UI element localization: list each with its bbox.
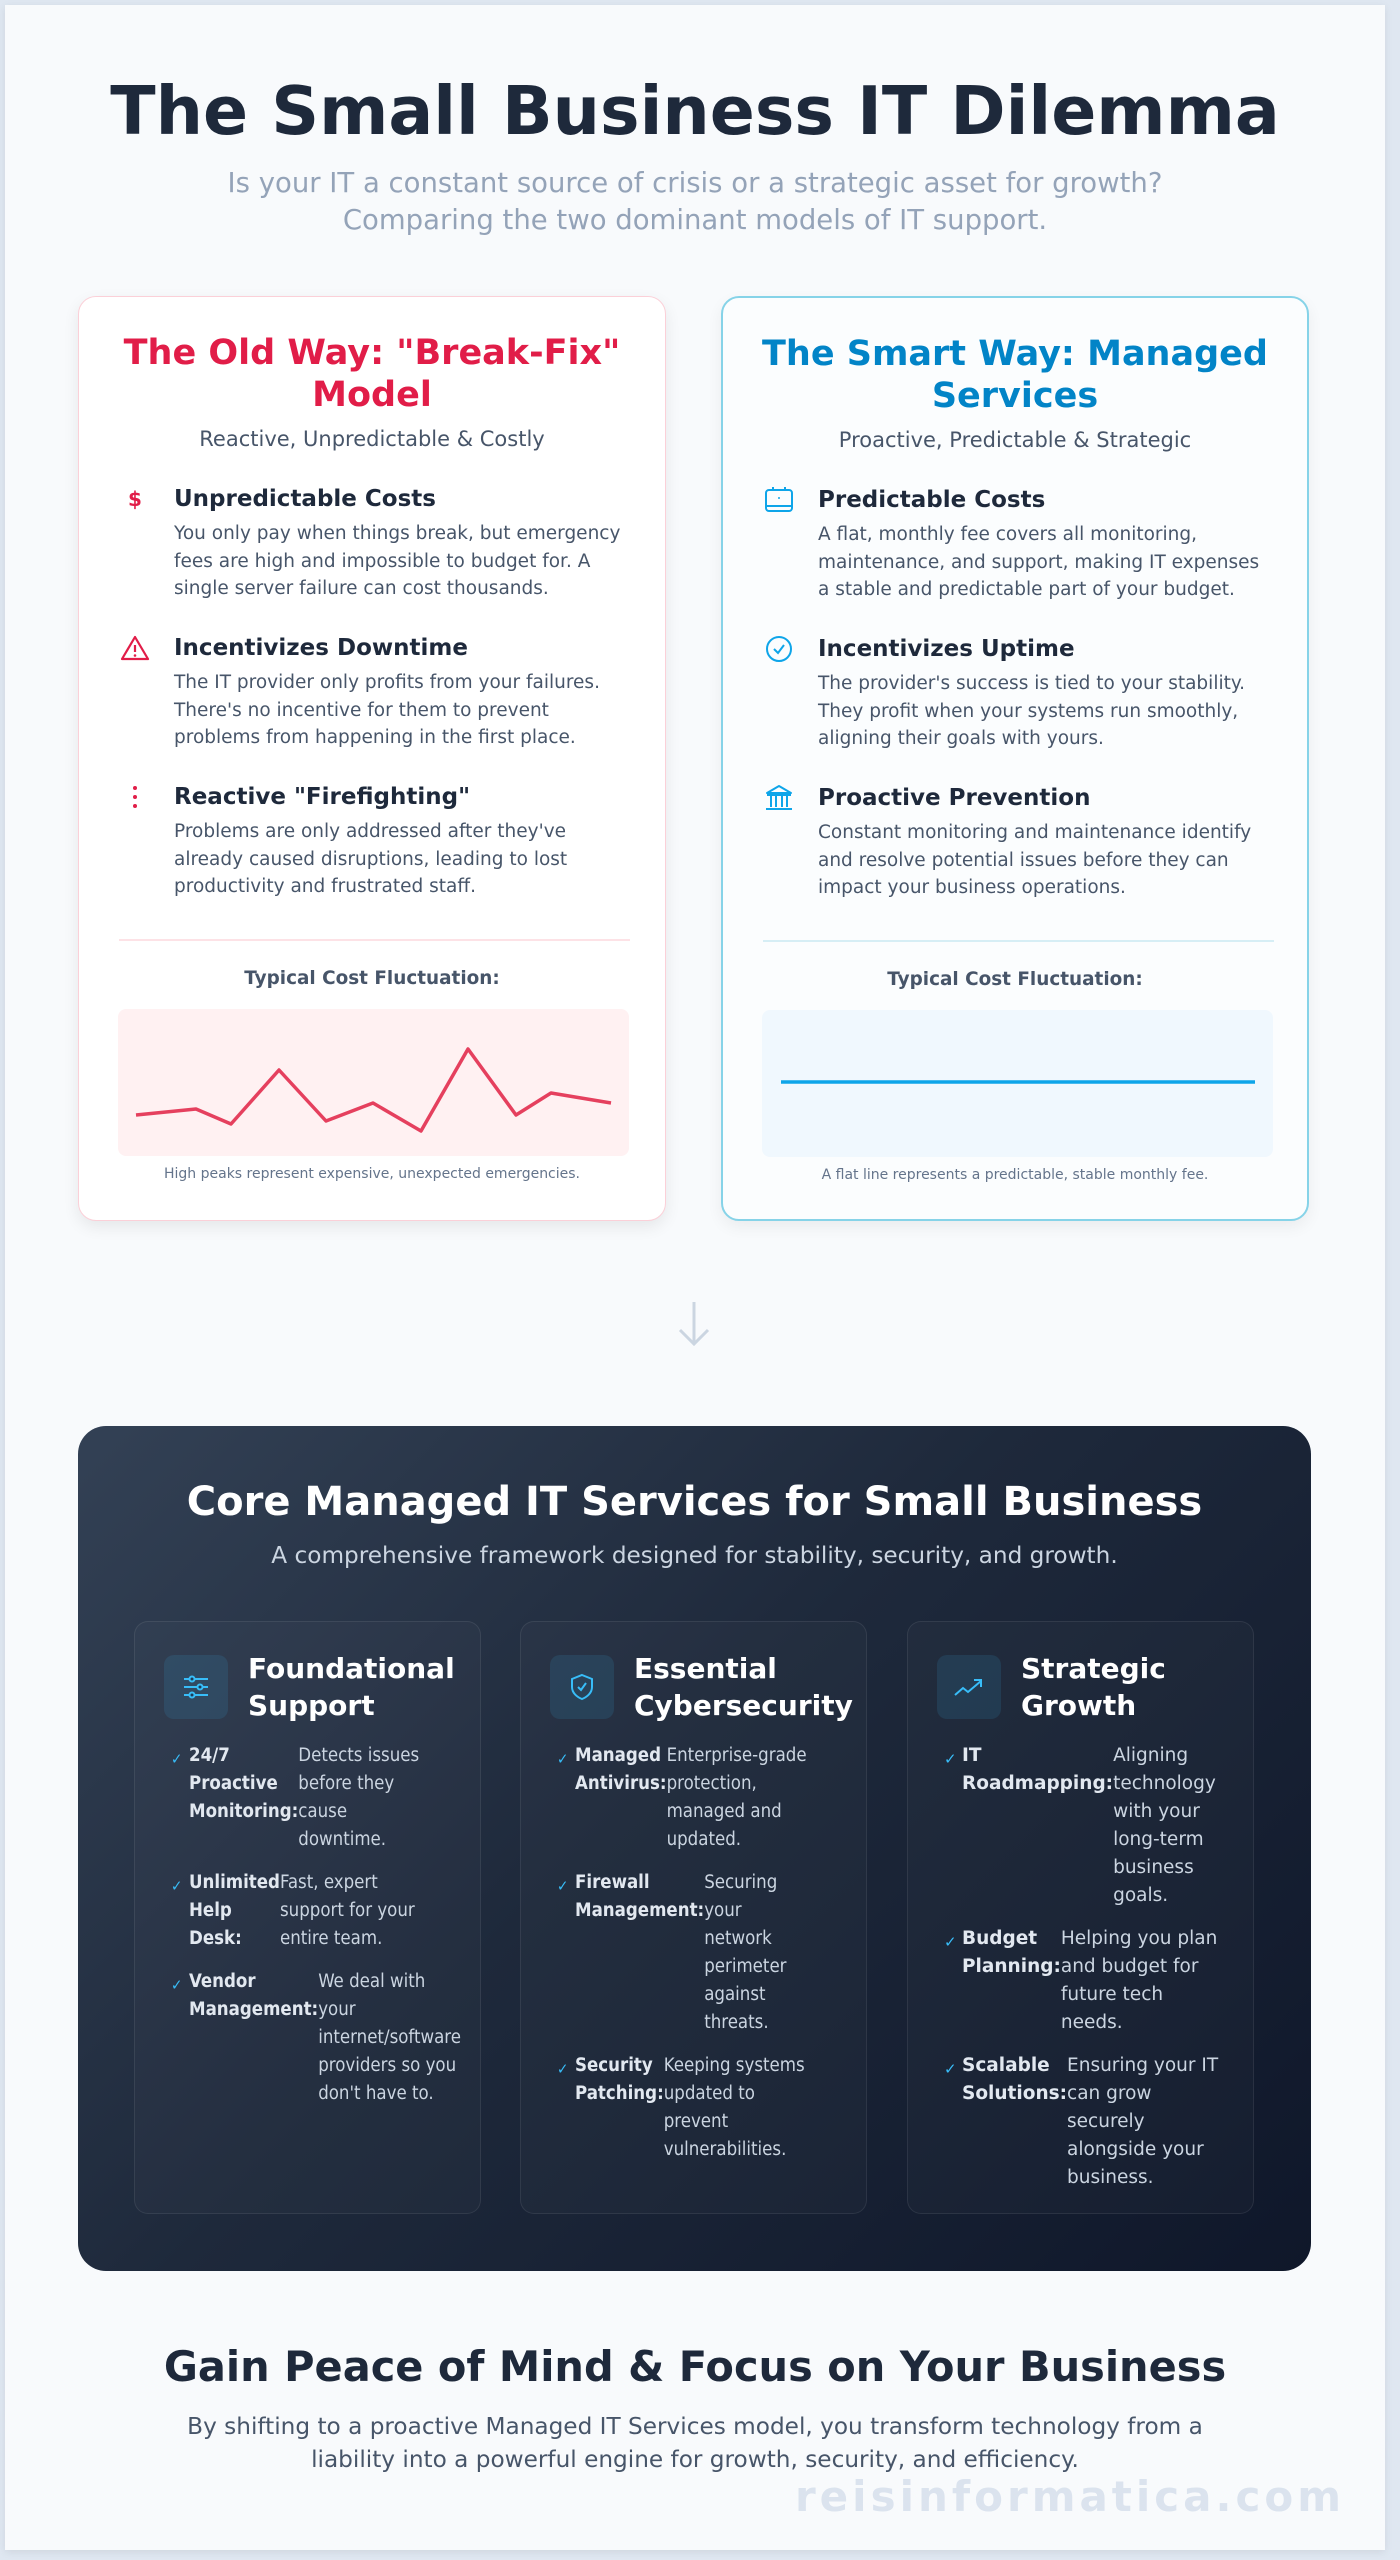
list bbox=[171, 1745, 461, 2104]
list: ✓ bbox=[944, 1750, 957, 1768]
subheading: Proactive, Predictable & Strategic bbox=[839, 428, 1191, 452]
heading: smart way: The Smart Way: Managed Services bbox=[762, 334, 1268, 416]
icon: shield bbox=[550, 1655, 614, 1719]
item: firefighting bbox=[133, 784, 567, 897]
list: We deal with your internet/software providers so you don't have to. bbox=[318, 1971, 461, 2104]
list: Unlimited Help Desk: bbox=[189, 1872, 280, 1949]
list: Fast, expert support for your entire team. bbox=[280, 1872, 415, 1949]
footer text bbox=[187, 2413, 1203, 2473]
heading: Essential bbox=[634, 1652, 777, 1685]
item: proactive prevention: Constant monitoring and maintenance identify and resolve potential issues before they can impact your business operations. bbox=[818, 822, 1251, 898]
list: Scalable Solutions: bbox=[962, 2055, 1067, 2104]
subtitle: Is your IT a constant source of crisis or a strategic asset for growth? bbox=[228, 167, 1162, 199]
list: Budget Planning: bbox=[962, 1928, 1061, 1977]
item: firefighting: Problems are only addressed after they've already caused disruptions, leading to lost productivity and frustrated staff. bbox=[174, 821, 567, 897]
list: Security Patching: bbox=[575, 2055, 664, 2104]
item: incentivizes downtime: The IT provider only profits from your failures. There's no incentive for them to prevent problems from happening in the first place. bbox=[174, 672, 600, 748]
item: firefighting: Reactive "Firefighting" bbox=[174, 784, 470, 810]
item: unpredictable costs: Unpredictable Costs bbox=[174, 486, 436, 512]
footer text: liability into a powerful engine for growth, security, and efficiency. bbox=[311, 2446, 1079, 2473]
item: predictable costs: Predictable Costs bbox=[818, 487, 1045, 513]
heading: old way: The Old Way: "Break-Fix" Model bbox=[124, 333, 620, 415]
list: Aligning technology with your long-term business goals. bbox=[1113, 1745, 1216, 1906]
footer heading: Gain Peace of Mind & Focus on Your Business bbox=[164, 2342, 1226, 2391]
list: Managed Antivirus: bbox=[575, 1745, 667, 1794]
list: Enterprise-grade protection, managed and updated. bbox=[667, 1745, 807, 1850]
panel: core managed IT services bbox=[78, 1426, 1311, 2271]
item: unpredictable costs: You only pay when things break, but emergency fees are high and impossible to budget for. A single server failure can cost thousands. bbox=[174, 523, 620, 599]
list: ✓ bbox=[171, 1750, 182, 1768]
icon: calendar bbox=[765, 487, 793, 512]
title: The Small Business IT Dilemma bbox=[110, 72, 1280, 150]
item: unpredictable costs bbox=[128, 486, 620, 599]
footer text: By shifting to a proactive Managed IT Services model, you transform technology from a bbox=[187, 2413, 1203, 2440]
list: ✓ bbox=[944, 2060, 957, 2078]
icon: bank bbox=[766, 785, 792, 810]
heading: Core Managed IT Services for Small Business bbox=[187, 1479, 1202, 1525]
card: foundational support bbox=[134, 1621, 481, 2214]
icon: dollar: $ bbox=[128, 487, 142, 511]
heading: Strategic bbox=[1021, 1652, 1166, 1685]
chart: fluctuating costs bbox=[118, 1009, 629, 1156]
list: 24/7 Proactive Monitoring: bbox=[189, 1745, 298, 1822]
list: ✓ bbox=[171, 1976, 182, 1994]
caption: High peaks represent expensive, unexpected emergencies. bbox=[164, 1166, 580, 1182]
heading: Foundational bbox=[248, 1652, 455, 1685]
card: strategic growth bbox=[907, 1621, 1254, 2214]
heading: Growth bbox=[1021, 1689, 1136, 1722]
icon: sliders bbox=[164, 1655, 228, 1719]
panel: break-fix model bbox=[78, 296, 666, 1221]
heading: Support bbox=[248, 1689, 375, 1722]
item: proactive prevention: Proactive Prevention bbox=[818, 785, 1090, 811]
subtitle: Comparing the two dominant models of IT support. bbox=[343, 204, 1047, 236]
chart title: Typical Cost Fluctuation: bbox=[244, 968, 500, 989]
item: incentivizes uptime: The provider's success is tied to your stability. They profit when your systems run smoothly, aligning their goals with yours. bbox=[818, 673, 1245, 749]
list bbox=[557, 1745, 807, 2160]
heading: Cybersecurity bbox=[634, 1689, 853, 1722]
list: Keeping systems updated to prevent vulnerabilities. bbox=[664, 2055, 805, 2160]
list: Helping you plan and budget for future tech needs. bbox=[1061, 1928, 1217, 2033]
card: essential cybersecurity bbox=[520, 1621, 867, 2214]
icon: dots bbox=[133, 786, 137, 808]
watermark: reisinformatica.com bbox=[795, 2472, 1345, 2521]
list: ✓ bbox=[944, 1933, 957, 1951]
chart title: Typical Cost Fluctuation: bbox=[887, 969, 1143, 990]
panel: managed services bbox=[721, 296, 1309, 1221]
item: incentivizes uptime: Incentivizes Uptime bbox=[818, 636, 1075, 662]
item: incentivizes downtime: Incentivizes Downtime bbox=[174, 635, 468, 661]
list: ✓ bbox=[557, 1877, 568, 1895]
item: incentivizes downtime bbox=[120, 635, 600, 748]
list: Ensuring your IT can grow securely alongside your business. bbox=[1067, 2055, 1218, 2188]
heading bbox=[248, 1652, 455, 1722]
list: Firewall Management: bbox=[575, 1872, 704, 1921]
arrow: down bbox=[679, 1302, 709, 1346]
subtitle bbox=[228, 167, 1162, 236]
list: IT Roadmapping: bbox=[962, 1745, 1113, 1794]
icon: check circle bbox=[766, 636, 792, 662]
list bbox=[944, 1745, 1218, 2188]
chart: flat cost bbox=[762, 1010, 1273, 1157]
list: ✓ bbox=[557, 2060, 568, 2078]
icon: warning bbox=[120, 636, 150, 660]
item: predictable costs: A flat, monthly fee covers all monitoring, maintenance, and support, making IT expenses a stable and predictable part of your budget. bbox=[818, 524, 1259, 600]
item: incentivizes uptime bbox=[766, 636, 1245, 749]
list: Detects issues before they cause downtime. bbox=[298, 1745, 419, 1850]
item: proactive prevention bbox=[766, 785, 1251, 898]
subheading: Reactive, Unpredictable & Costly bbox=[199, 427, 545, 451]
heading bbox=[1021, 1652, 1166, 1722]
list: ✓ bbox=[557, 1750, 568, 1768]
list: Securing your network perimeter against threats. bbox=[704, 1872, 787, 2033]
heading bbox=[634, 1652, 853, 1722]
item: predictable costs bbox=[765, 487, 1259, 600]
list: Vendor Management: bbox=[189, 1971, 318, 2020]
subheading: A comprehensive framework designed for stability, security, and growth. bbox=[271, 1542, 1118, 1569]
caption: A flat line represents a predictable, stable monthly fee. bbox=[822, 1167, 1208, 1183]
icon: trend up bbox=[937, 1655, 1001, 1719]
list: ✓ bbox=[171, 1877, 182, 1895]
